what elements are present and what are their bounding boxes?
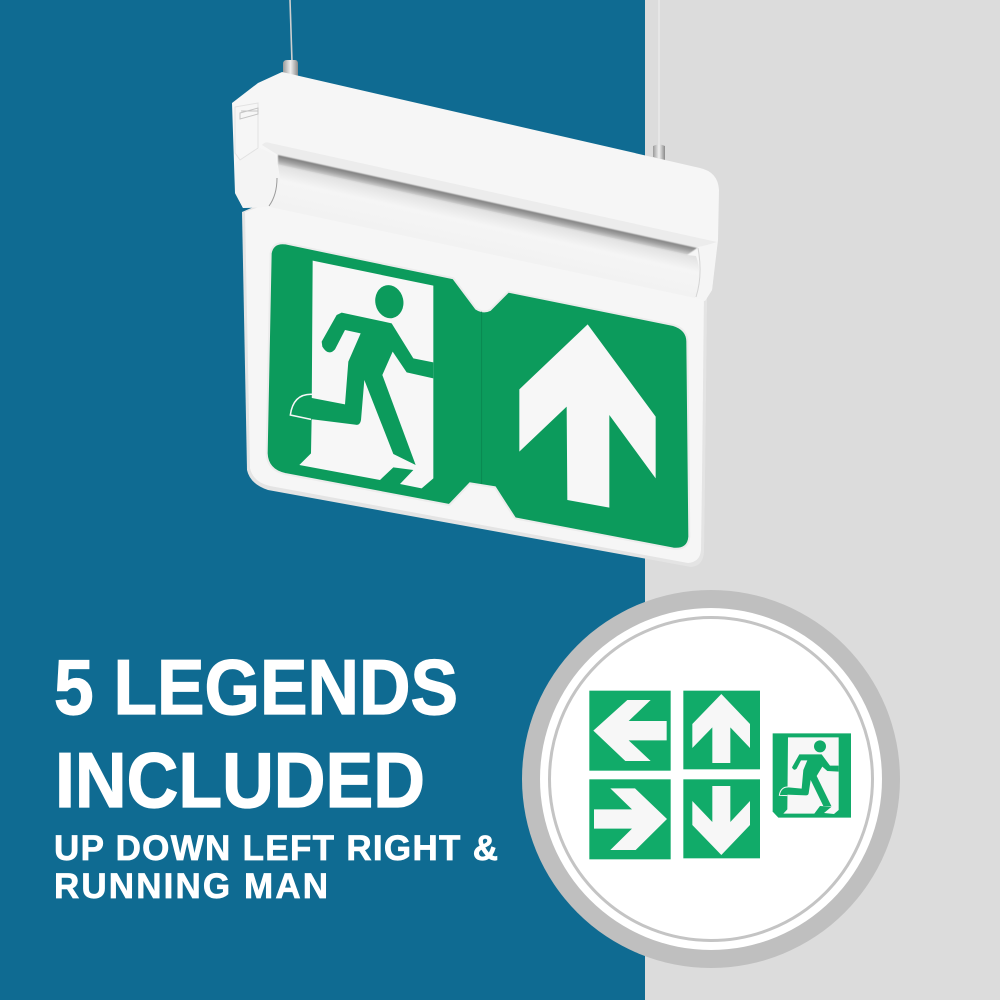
icon: running man	[773, 733, 851, 818]
headline text	[54, 643, 458, 824]
foot outline	[290, 394, 313, 419]
door opening	[299, 261, 433, 488]
icon: down arrow	[683, 779, 760, 858]
subheading text	[54, 829, 498, 906]
end cap decal	[235, 103, 258, 160]
inner ring	[550, 618, 872, 940]
subheading line two: RUNNING MAN	[54, 867, 328, 906]
icon: left arrow	[589, 691, 671, 771]
right ferrule	[653, 144, 665, 160]
left ferrule	[283, 60, 298, 78]
icon: right arrow	[589, 779, 671, 859]
icon: up arrow	[683, 691, 760, 769]
sign body face	[245, 203, 704, 563]
up arrow	[519, 324, 656, 508]
mounting housing	[232, 72, 719, 301]
suspension wires	[290, 0, 659, 146]
left end cap	[235, 148, 280, 208]
subheading line one: UP DOWN LEFT RIGHT &	[54, 829, 498, 868]
sign face	[267, 243, 689, 549]
running man	[291, 282, 433, 465]
housing top	[232, 72, 719, 301]
exit sign product	[232, 0, 719, 567]
blue background panel	[0, 0, 645, 1000]
right bracket edge	[696, 248, 700, 297]
heading line two: INCLUDED	[55, 736, 425, 824]
lip strip	[262, 142, 717, 248]
heading line one: 5 LEGENDS	[54, 643, 458, 731]
centre seam	[480, 312, 483, 484]
sign body	[242, 200, 707, 567]
grey background panel	[645, 0, 1000, 1000]
green panel	[267, 243, 689, 549]
cap edge shadow	[269, 178, 277, 206]
end cap label marks	[240, 108, 258, 119]
outer ring	[522, 590, 900, 968]
head	[372, 282, 406, 321]
roller	[270, 165, 699, 298]
circular legends badge	[522, 590, 900, 968]
white disc	[540, 608, 882, 950]
legend icons	[589, 691, 851, 859]
body	[291, 313, 433, 465]
groove	[278, 155, 697, 255]
right end bracket	[695, 243, 717, 301]
